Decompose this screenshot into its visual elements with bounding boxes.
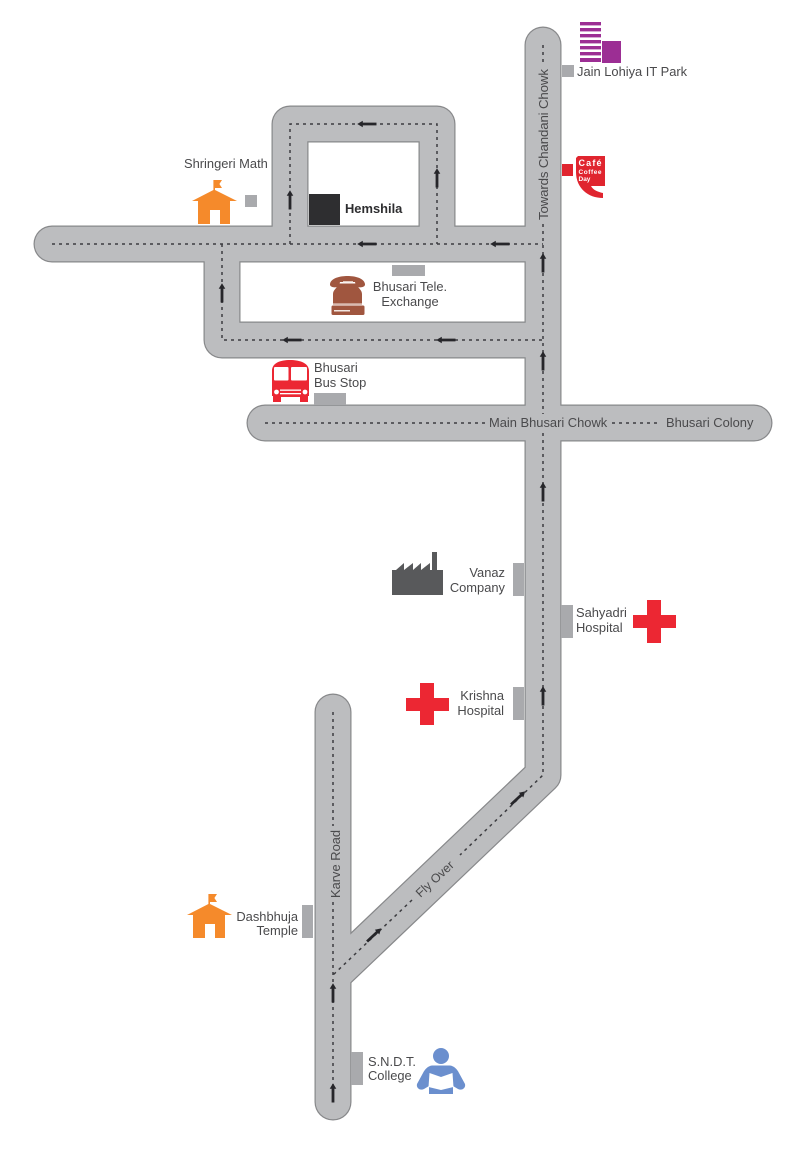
label: Dashbhuja Temple: Dashbhuja — [236, 909, 299, 924]
icon: Shringeri Math temple — [192, 180, 237, 224]
icon: Cafe Coffee Day logo — [576, 156, 605, 198]
label: Bhusari Colony: Bhusari Colony — [666, 415, 754, 430]
label: Bhusari Tele. Exchange: Exchange — [381, 294, 439, 309]
direction arrows — [219, 121, 546, 1102]
label: Krishna Hospital: Krishna — [460, 688, 505, 703]
label: Krishna Hospital: Hospital — [457, 703, 504, 718]
icon: Dashbhuja Temple — [187, 894, 232, 938]
label: Fly Over: Fly Over — [413, 858, 457, 900]
icon: Hemshila building — [309, 194, 340, 225]
label: Bhusari Tele. Exchange: Bhusari Tele. — [373, 279, 447, 294]
icon: bus — [272, 360, 309, 402]
label: Hemshila: Hemshila — [345, 201, 403, 216]
label: Bhusari Bus Stop: Bus Stop — [314, 375, 366, 390]
dashed route lines — [52, 45, 660, 1102]
landmark markers — [245, 65, 574, 1085]
label: S.N.D.T. College: S.N.D.T. — [368, 1054, 416, 1069]
icon: Cafe Coffee Day logo: Café — [578, 158, 602, 168]
icon: S.N.D.T. College reader — [417, 1048, 465, 1094]
label: Shringeri Math: Shringeri Math — [184, 156, 268, 171]
label: Main Bhusari Chowk: Main Bhusari Chowk — [489, 415, 608, 430]
label: Bhusari Bus Stop: Bhusari — [314, 360, 358, 375]
label: Sahyadri Hospital: Hospital — [576, 620, 623, 635]
label: Towards Chandani Chowk: Towards Chandani Chowk — [536, 69, 551, 220]
icon: Jain Lohiya IT Park building — [580, 22, 621, 63]
icon: telephone — [330, 276, 365, 315]
label: Vanaz Company: Vanaz — [469, 565, 505, 580]
label: Sahyadri Hospital: Sahyadri — [576, 605, 627, 620]
icon: Sahyadri Hospital cross — [633, 600, 676, 643]
icon: Cafe Coffee Day logo: Coffee — [578, 169, 602, 176]
label: Vanaz Company: Company — [450, 580, 506, 595]
icon: Krishna Hospital cross — [406, 683, 449, 725]
label: S.N.D.T. College: College — [368, 1068, 412, 1083]
label: Jain Lohiya IT Park: Jain Lohiya IT Park — [577, 64, 688, 79]
icon: Vanaz factory — [392, 552, 443, 595]
label: Dashbhuja Temple: Temple — [256, 923, 298, 938]
label: Karve Road: Karve Road — [328, 830, 343, 898]
icon: Cafe Coffee Day logo: Day — [578, 176, 591, 183]
